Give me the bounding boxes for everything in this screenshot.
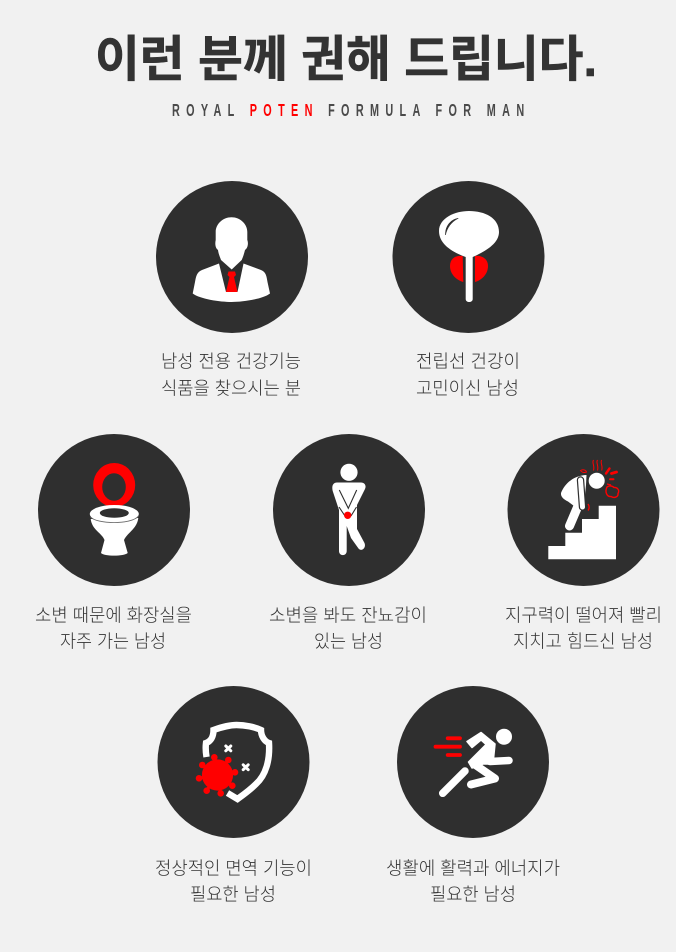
label xyxy=(155,858,312,904)
label xyxy=(161,352,301,398)
icon: prostate xyxy=(392,181,544,333)
panel: vitality and energy xyxy=(386,686,560,904)
label: 지구력이 떨어져 빨리 xyxy=(505,606,662,626)
label xyxy=(386,858,560,904)
label: 필요한 남성 xyxy=(430,884,516,904)
label: 소변 때문에 화장실을 xyxy=(35,606,192,626)
label xyxy=(269,606,427,652)
icon: toilet xyxy=(38,434,190,586)
icon: running man xyxy=(397,686,549,838)
panel: health food for men xyxy=(156,181,308,398)
label: 전립선 건강이 xyxy=(416,352,520,372)
subtitle: ROYAL POTEN FORMULA FOR MAN xyxy=(172,102,524,121)
label: 필요한 남성 xyxy=(190,884,276,904)
icon: man tired on stairs xyxy=(508,434,660,586)
panel: immune function xyxy=(155,686,312,904)
title: 이런 분께 권해 드립니다. xyxy=(95,33,597,87)
label xyxy=(35,606,192,652)
panel: frequent toilet visits xyxy=(35,434,192,652)
label: 고민이신 남성 xyxy=(416,378,519,398)
panel: prostate health xyxy=(392,181,544,398)
label: 정상적인 면역 기능이 xyxy=(155,858,312,878)
label: 남성 전용 건강기능 xyxy=(161,352,301,372)
label: 식품을 찾으시는 분 xyxy=(161,378,301,398)
label xyxy=(505,606,662,652)
label: 있는 남성 xyxy=(314,632,383,652)
label xyxy=(416,352,520,398)
panel: low stamina xyxy=(505,434,662,652)
label: 소변을 봐도 잔뇨감이 xyxy=(269,606,427,626)
icon: businessman xyxy=(156,181,308,333)
icon: shield and virus xyxy=(158,686,310,838)
label: 자주 가는 남성 xyxy=(60,632,166,652)
label: 생활에 활력과 에너지가 xyxy=(386,858,560,878)
icon: man holding groin xyxy=(273,434,425,586)
label: 지치고 힘드신 남성 xyxy=(513,632,653,652)
panel: residual urine xyxy=(269,434,427,652)
